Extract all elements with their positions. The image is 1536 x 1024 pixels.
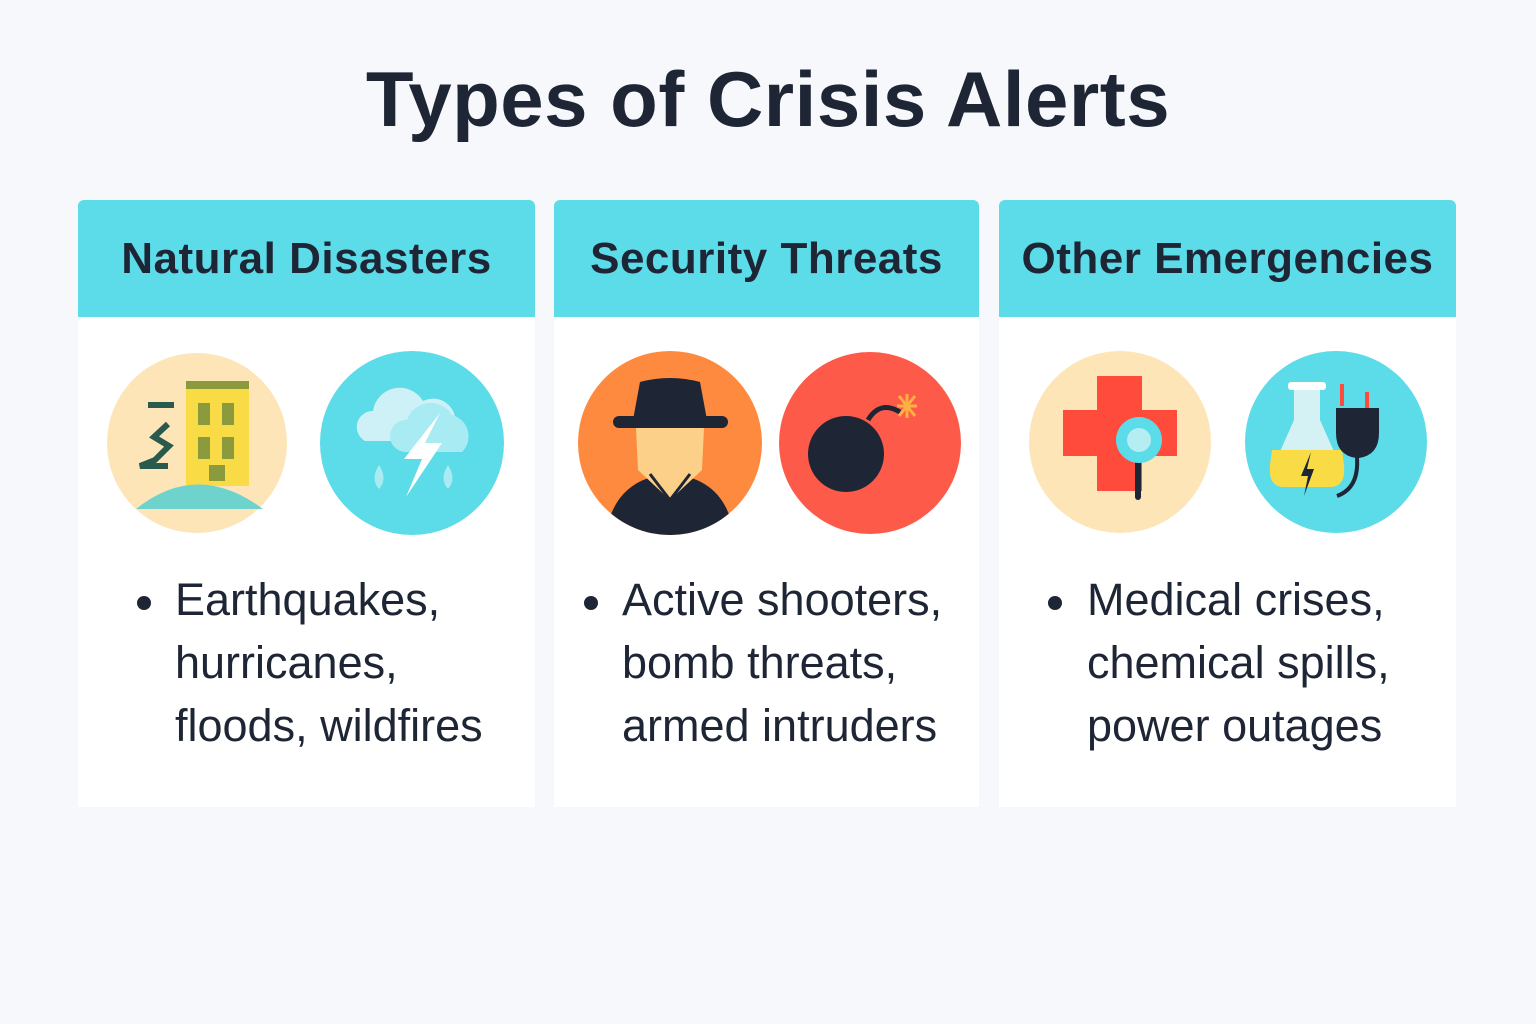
bullet list: other emergencies bbox=[1048, 574, 1390, 751]
header: security threats bbox=[554, 200, 979, 317]
icon: earthquake building bbox=[107, 353, 287, 533]
panel: natural disasters: hurricanes, bbox=[175, 637, 398, 688]
header: security threats: Security Threats bbox=[590, 234, 943, 283]
panel: natural disasters bbox=[78, 200, 535, 807]
panel: security threats: Active shooters, bbox=[622, 574, 942, 625]
panel: natural disasters: floods, wildfires bbox=[175, 700, 483, 751]
icons: shooter and bomb bbox=[578, 351, 961, 535]
title: Types of Crisis Alerts bbox=[366, 55, 1170, 143]
panel: other emergencies: Medical crises, bbox=[1087, 574, 1385, 625]
panel: natural disasters: Earthquakes, bbox=[175, 574, 440, 625]
icon: bomb bbox=[779, 352, 961, 534]
icon: thunderstorm bbox=[320, 351, 504, 535]
header: other emergencies bbox=[999, 200, 1456, 317]
header: other emergencies: Other Emergencies bbox=[1022, 234, 1434, 283]
bullet list: natural disasters bbox=[137, 574, 483, 751]
header: natural disasters: Natural Disasters bbox=[121, 234, 492, 283]
icons: earthquake and storm bbox=[107, 351, 504, 535]
bullet list: security threats bbox=[584, 574, 942, 751]
icon: masked person bbox=[578, 351, 762, 540]
icon: chemical flask and plug bbox=[1245, 351, 1427, 533]
icon: medical cross bbox=[1029, 351, 1211, 533]
panel: security threats bbox=[554, 200, 979, 742]
panel: other emergencies bbox=[999, 200, 1456, 807]
panel: security threats: bomb threats, bbox=[622, 637, 897, 688]
panel: other emergencies: chemical spills, bbox=[1087, 637, 1390, 688]
panel: other emergencies: power outages bbox=[1087, 700, 1382, 751]
header: natural disasters bbox=[78, 200, 535, 317]
icons: medical and chemical/power bbox=[1029, 351, 1427, 533]
panel: security threats: armed intruders bbox=[622, 700, 937, 751]
